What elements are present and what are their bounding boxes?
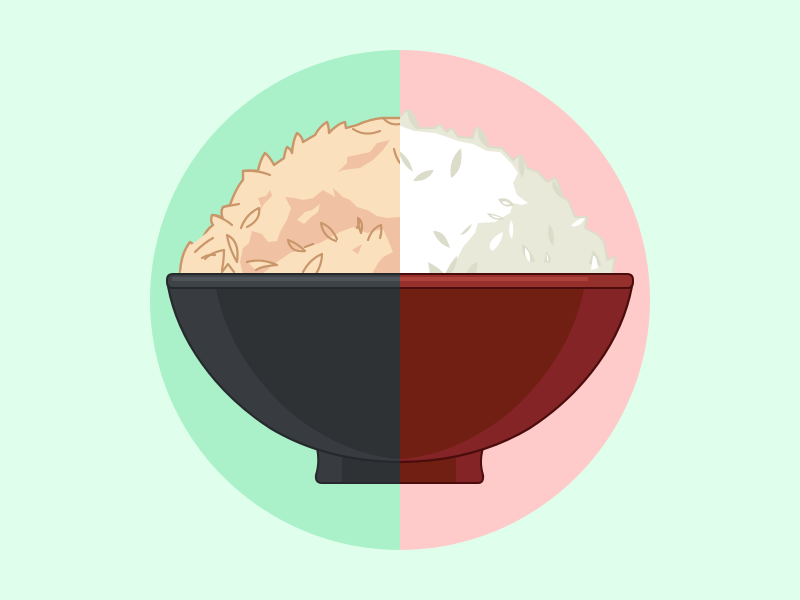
brown rice mound — [180, 118, 402, 276]
black bowl foot — [316, 448, 402, 483]
black bowl half — [167, 274, 402, 483]
red bowl half — [398, 274, 633, 483]
white rice grains — [398, 110, 601, 275]
black bowl rim — [167, 274, 402, 288]
background circle — [150, 50, 650, 550]
white area — [398, 125, 528, 274]
white rice mound — [398, 110, 615, 276]
red bowl rim — [398, 274, 633, 288]
illustration: split rice bowl — [150, 50, 650, 550]
red bowl body — [398, 286, 632, 462]
brown rice grains — [195, 118, 400, 274]
black bowl body — [168, 286, 402, 462]
shaded rice — [240, 188, 400, 274]
red bowl foot — [398, 448, 483, 483]
